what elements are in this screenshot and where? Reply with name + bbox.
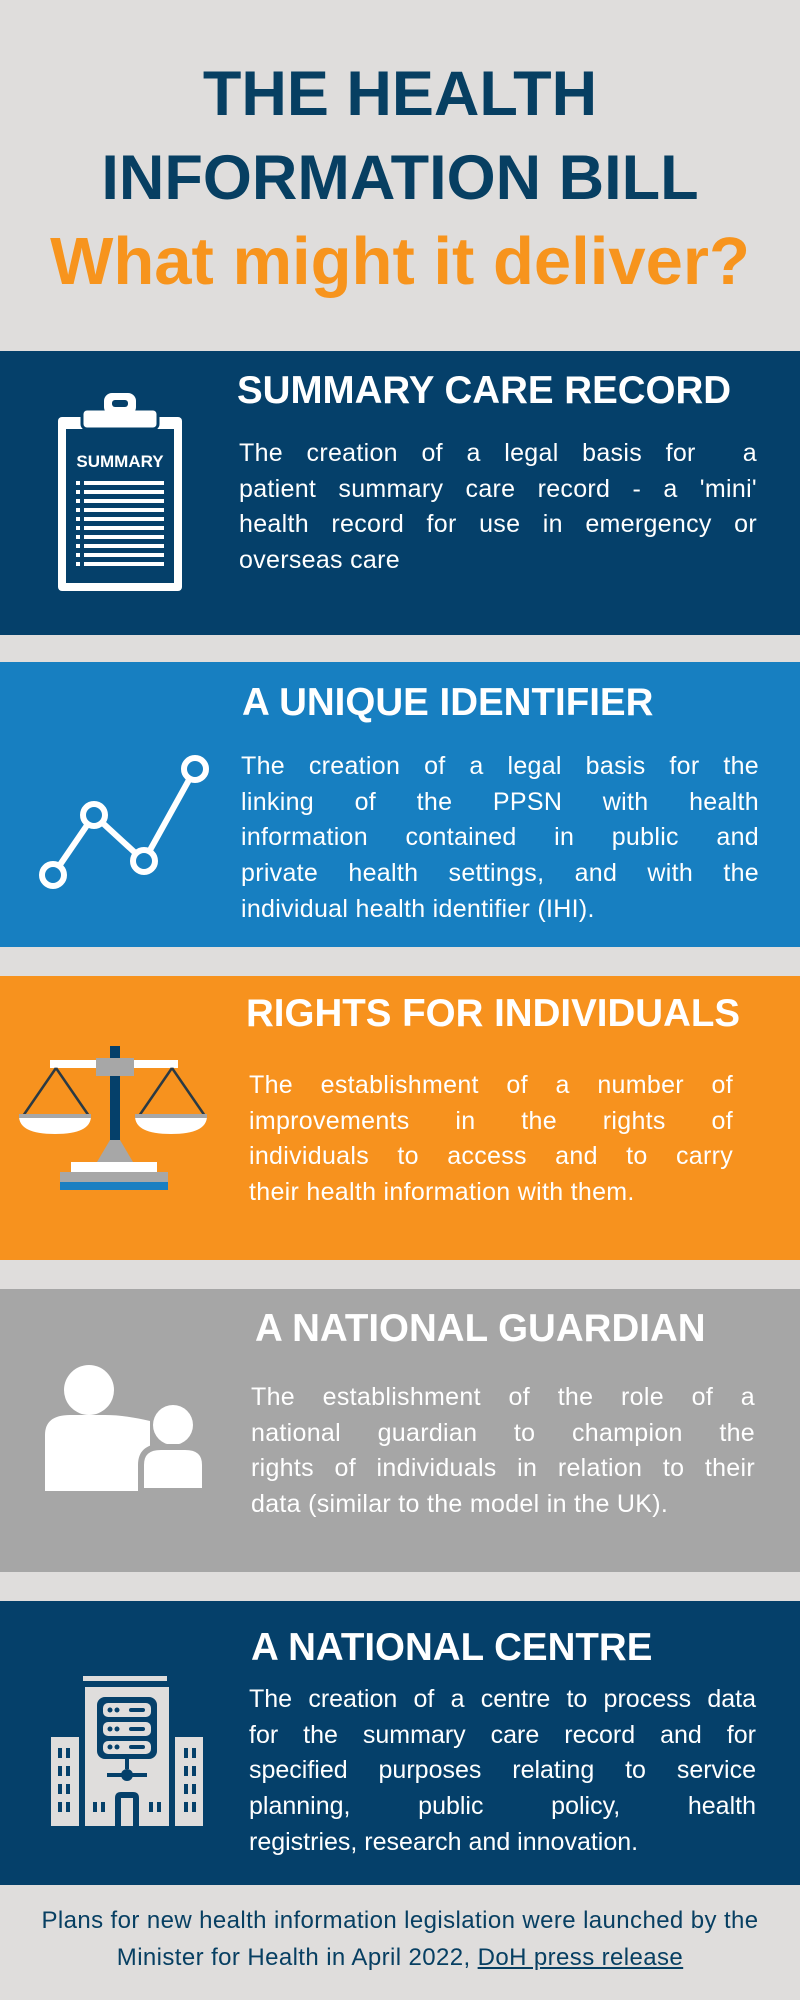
heading: SUMMARY CARE RECORD [237, 369, 731, 412]
icon: clipboard [58, 393, 182, 591]
heading: A NATIONAL GUARDIAN [255, 1307, 706, 1350]
title [50, 59, 750, 299]
footer note [41, 1907, 759, 1971]
text block: The creation of a centre to process data [249, 1685, 756, 1713]
text block: registries, research and innovation. [249, 1828, 638, 1856]
icon: people [45, 1365, 202, 1491]
heading: A UNIQUE IDENTIFIER [242, 681, 653, 724]
title: INFORMATION BILL [101, 143, 699, 213]
panel: national guardian [0, 1289, 800, 1572]
text block: national guardian to champion the [251, 1419, 755, 1447]
text block [249, 1071, 733, 1206]
panel: unique identifier [0, 662, 800, 947]
panel: national centre [0, 1601, 800, 1885]
icon: scales [19, 1046, 207, 1190]
text block: The creation of a legal basis for the [241, 752, 759, 780]
text block: their health information with them. [249, 1178, 635, 1206]
text block: overseas care [239, 546, 400, 574]
text block: The creation of a legal basis for a [239, 439, 757, 467]
panel: summary care record [0, 351, 800, 635]
text block: planning, public policy, health [249, 1792, 756, 1820]
text block: The establishment of the role of a [251, 1383, 755, 1411]
text block [241, 752, 759, 923]
icon: line chart [39, 755, 209, 889]
footer note: Plans for new health information legislation were launched by the [41, 1907, 759, 1934]
panel: rights for individuals [0, 976, 800, 1260]
text block [251, 1383, 755, 1518]
text block: individual health identifier (IHI). [241, 895, 595, 923]
text block: individuals to access and to carry [249, 1142, 733, 1170]
icon: clipboard: SUMMARY [76, 452, 164, 471]
text block: The establishment of a number of [249, 1071, 733, 1099]
text block: for the summary care record and for [249, 1721, 756, 1749]
text block: health record for use in emergency or [239, 510, 757, 538]
text block: improvements in the rights of [249, 1107, 733, 1135]
text block: rights of individuals in relation to their [251, 1454, 755, 1482]
footer note: Minister for Health in April 2022, DoH press release [117, 1944, 683, 1971]
text block: data (similar to the model in the UK). [251, 1490, 668, 1518]
text block [239, 439, 757, 574]
icon: building [51, 1676, 203, 1826]
text block: private health settings, and with the [241, 859, 759, 887]
text block: linking of the PPSN with health [241, 788, 759, 816]
heading: A NATIONAL CENTRE [251, 1626, 652, 1669]
text block: information contained in public and [241, 823, 759, 851]
heading: RIGHTS FOR INDIVIDUALS [246, 992, 740, 1035]
text block: patient summary care record - a 'mini' [239, 475, 757, 503]
title: THE HEALTH [203, 59, 597, 129]
text block [249, 1685, 756, 1856]
title: What might it deliver? [50, 224, 750, 299]
text block: specified purposes relating to service [249, 1756, 756, 1784]
